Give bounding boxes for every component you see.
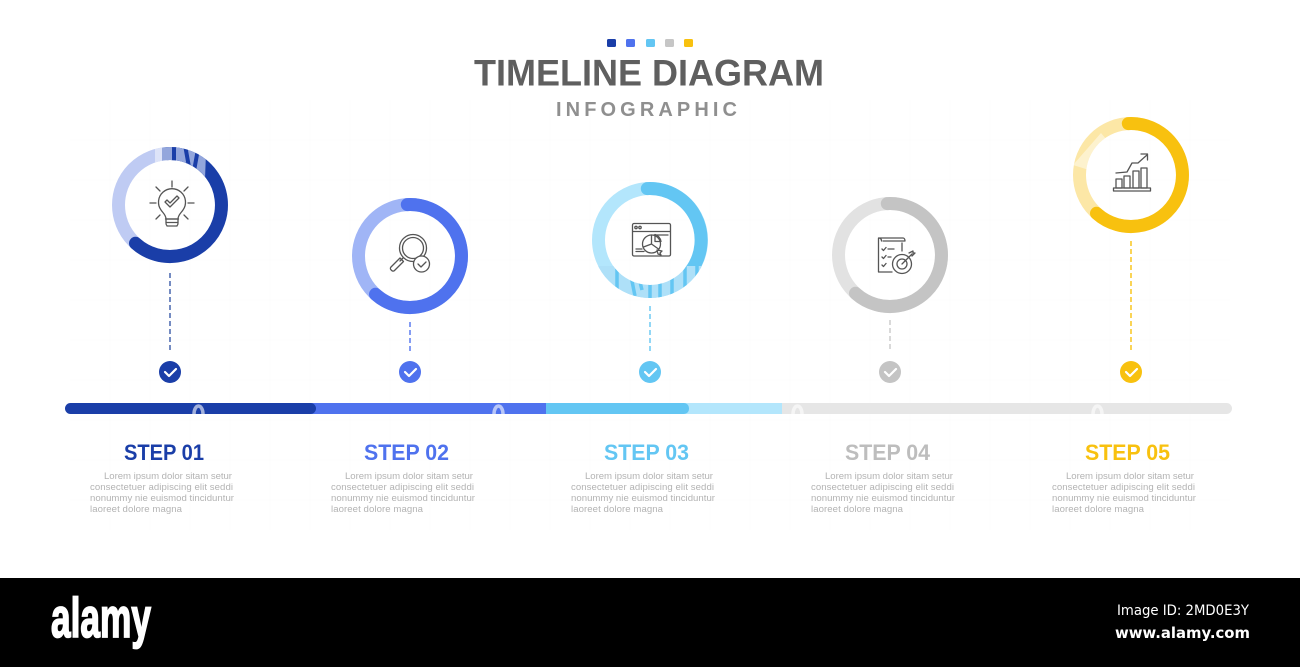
step 4 description: Lorem ipsum dolor sitam setur xyxy=(825,471,954,482)
footer logo: alamy xyxy=(51,586,151,649)
step 3 milestone: sky ring with dashboard icon xyxy=(590,188,710,383)
step 1 description: consectetuer adipiscing elit seddi xyxy=(90,482,233,493)
image id: Image ID: 2MD0E3Y xyxy=(1117,603,1249,619)
check marker 3 xyxy=(639,361,661,383)
check marker 5 xyxy=(1120,361,1142,383)
step 2 description: Lorem ipsum dolor sitam setur xyxy=(345,471,474,482)
icon: browser window with pie chart xyxy=(632,224,670,256)
step 5 description: Lorem ipsum dolor sitam setur xyxy=(1066,471,1195,482)
step 5 milestone: yellow ring with growth chart icon xyxy=(1073,124,1182,383)
step 3 description: laoreet dolore magna xyxy=(571,504,664,515)
step 4 description: laoreet dolore magna xyxy=(811,504,904,515)
connector 1 xyxy=(169,273,171,352)
connector 3 xyxy=(649,306,651,352)
footer bar xyxy=(0,578,1300,667)
step 3 heading: STEP 03 xyxy=(604,440,689,465)
step 5 heading: STEP 05 xyxy=(1085,440,1170,465)
ring 3 xyxy=(590,188,710,300)
step 2 description: consectetuer adipiscing elit seddi xyxy=(331,482,474,493)
step 1 description: Lorem ipsum dolor sitam setur xyxy=(104,471,233,482)
connector 5 xyxy=(1130,241,1132,352)
step 4 milestone: grey ring with checklist target icon xyxy=(838,204,942,383)
timeline progress bar xyxy=(65,403,1232,414)
step 2 text xyxy=(331,440,476,515)
step 5 description: consectetuer adipiscing elit seddi xyxy=(1052,482,1195,493)
ring 1 xyxy=(118,145,222,257)
connector 4 xyxy=(889,320,891,352)
subtitle: INFOGRAPHIC xyxy=(556,99,741,121)
step 3 description xyxy=(571,471,716,515)
step 2 description: nonummy nie euismod tinciduntur xyxy=(331,493,476,504)
step 1 text xyxy=(90,440,235,515)
step 2 milestone: periwinkle ring with magnifier icon xyxy=(358,204,462,383)
icon: magnifier with check xyxy=(390,234,430,272)
step 5 description: nonummy nie euismod tinciduntur xyxy=(1052,493,1197,504)
icon: lightbulb xyxy=(150,181,194,226)
check marker 2 xyxy=(399,361,421,383)
step 1 description: laoreet dolore magna xyxy=(90,504,183,515)
step 1 milestone: blue ring with lightbulb icon xyxy=(118,145,222,383)
step 3 description: nonummy nie euismod tinciduntur xyxy=(571,493,716,504)
title: TIMELINE DIAGRAM xyxy=(474,52,824,94)
website: www.alamy.com xyxy=(1115,624,1250,642)
step 4 description: consectetuer adipiscing elit seddi xyxy=(811,482,954,493)
ring 2 xyxy=(358,204,462,308)
ring 5 xyxy=(1073,124,1182,227)
step 2 heading: STEP 02 xyxy=(364,440,449,465)
step 5 description xyxy=(1052,471,1197,515)
icon: bar chart with rising arrow xyxy=(1114,154,1150,191)
step 3 text xyxy=(571,440,716,515)
step 2 description: laoreet dolore magna xyxy=(331,504,424,515)
step 4 text xyxy=(811,440,956,515)
check marker 4 xyxy=(879,361,901,383)
check marker 1 xyxy=(159,361,181,383)
step 5 text xyxy=(1052,440,1197,515)
step 4 description: nonummy nie euismod tinciduntur xyxy=(811,493,956,504)
step 4 description xyxy=(811,471,956,515)
icon: checklist with target xyxy=(878,238,915,274)
step 1 description: nonummy nie euismod tinciduntur xyxy=(90,493,235,504)
header: colour swatches xyxy=(607,39,693,47)
step 5 description: laoreet dolore magna xyxy=(1052,504,1145,515)
step 1 heading: STEP 01 xyxy=(124,440,204,465)
step 3 description: Lorem ipsum dolor sitam setur xyxy=(585,471,714,482)
step 4 heading: STEP 04 xyxy=(845,440,931,465)
ring 4 xyxy=(838,204,942,307)
step 3 description: consectetuer adipiscing elit seddi xyxy=(571,482,714,493)
connector 2 xyxy=(409,322,411,352)
step 2 description xyxy=(331,471,476,515)
step 1 description xyxy=(90,471,235,515)
